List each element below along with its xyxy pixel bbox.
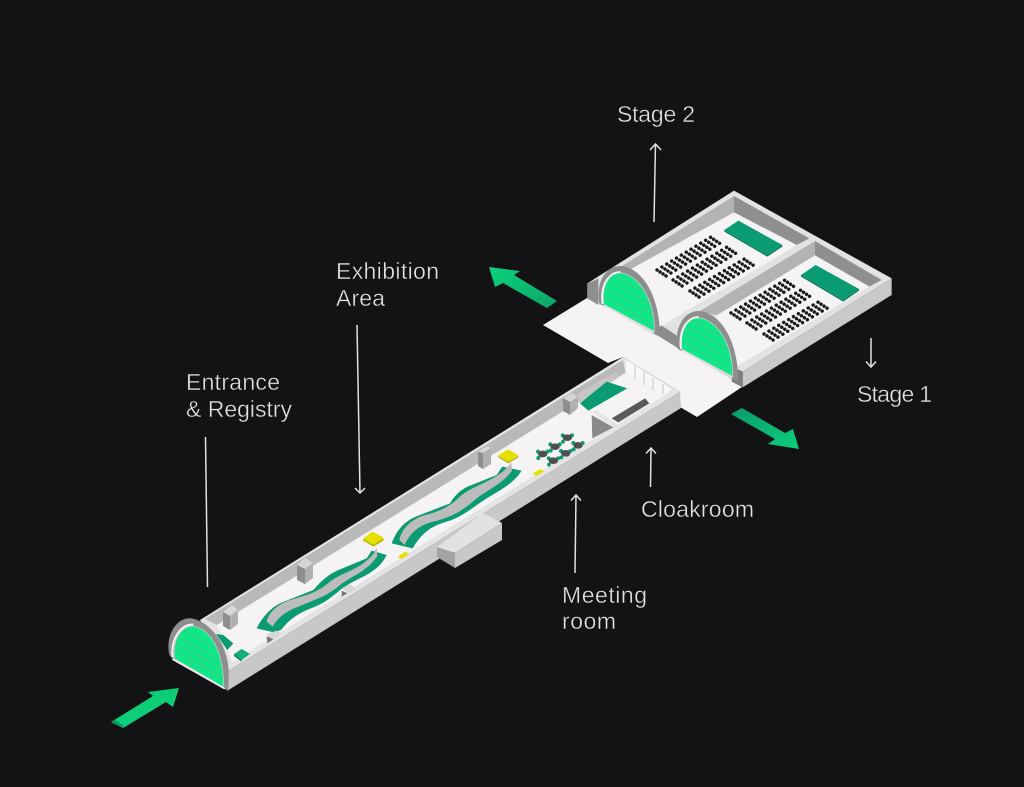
stage 2 seating (657, 237, 755, 297)
label: meeting room: Meeting (562, 582, 647, 608)
stage 2 arched door (599, 266, 660, 337)
stage 1 seating (731, 280, 829, 340)
coat rail (612, 398, 649, 422)
wave display 2 (392, 463, 522, 548)
arrow: out left (489, 267, 557, 308)
registration mats (216, 634, 250, 662)
wall piers (223, 393, 578, 630)
stage 2 room (617, 196, 809, 327)
yellow pads (363, 449, 544, 559)
stage 1 room (700, 241, 882, 366)
yellow pad (363, 532, 383, 546)
display plinths (267, 584, 357, 643)
label: exhibition area (336, 258, 439, 493)
arrow: into entrance (111, 688, 179, 728)
label: entrance and registry: Entrance (186, 369, 280, 395)
label: meeting room (562, 495, 647, 634)
label: stage 2 (617, 101, 695, 222)
label: stage 1: Stage 1 (857, 381, 932, 407)
label: stage 2: Stage 2 (617, 101, 695, 127)
wave display 1 (257, 548, 387, 633)
cloakroom fittings (580, 382, 649, 438)
label: cloakroom (641, 448, 754, 522)
meeting tables (536, 433, 585, 467)
panel: stage complex (587, 191, 892, 387)
entrance arched door (168, 618, 229, 691)
label: cloakroom: Cloakroom (641, 496, 754, 522)
arrow: out right (731, 408, 799, 449)
label: meeting room: room (562, 608, 616, 634)
label: exhibition area: Area (336, 285, 385, 311)
label: entrance and registry: & Registry (186, 396, 292, 422)
stage 1 arched door (677, 311, 738, 382)
exhibition displays and furniture, second section (363, 372, 617, 559)
cloakroom partition (592, 411, 618, 438)
exhibition displays and furniture, first section (216, 532, 387, 662)
green carpet (580, 382, 627, 411)
panel: corridor shell (200, 357, 681, 691)
cloakroom wall panel (578, 372, 617, 403)
label: exhibition area: Exhibition (336, 258, 439, 284)
label: stage 1 (857, 338, 932, 407)
label: entrance and registry (186, 369, 292, 587)
panel: forecourt floor (543, 298, 742, 417)
meeting room box (437, 513, 502, 568)
